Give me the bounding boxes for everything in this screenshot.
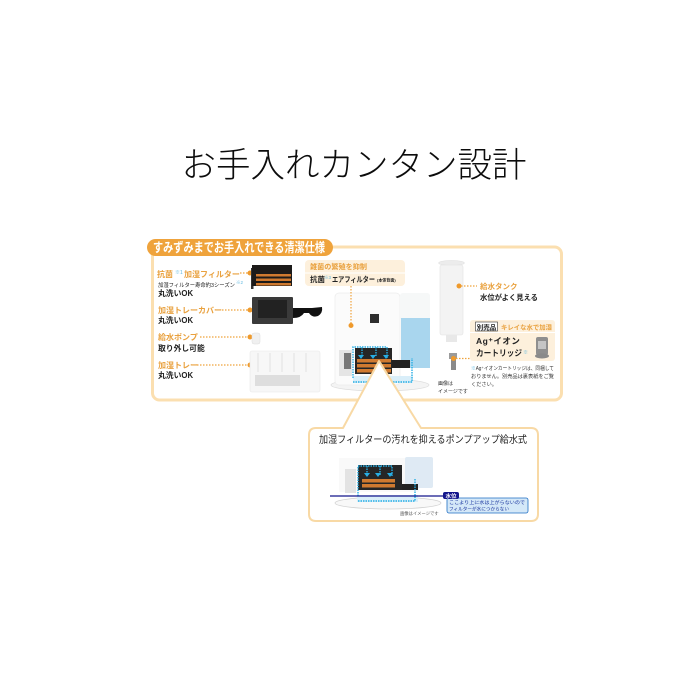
label: pump	[158, 332, 205, 353]
label: tray cover: 加湿トレーカバー	[158, 305, 222, 315]
callout panel: pump-up water supply	[309, 361, 538, 521]
small cartridge	[449, 353, 470, 370]
note: cartridge: ※Ag⁺イオンカートリッジは、同梱して	[471, 364, 554, 372]
callout: air filter: ※3	[324, 275, 331, 280]
note: cartridge: ください。	[471, 381, 497, 388]
label: humidifying filter: 加湿フィルター	[184, 269, 240, 279]
heading pill: すみずみまでお手入れできる清潔仕様	[153, 240, 325, 255]
label: water tank	[456, 281, 538, 302]
icon: pump	[252, 333, 260, 344]
callout: air filter	[305, 260, 405, 286]
icon: humidifying filter	[251, 265, 292, 289]
label: humidifying filter: 抗菌	[157, 269, 173, 279]
callout: air filter: エアフィルター	[332, 274, 375, 284]
callout: air filter: (本体背面)	[377, 276, 396, 282]
image caption: 画像はイメージです	[400, 510, 439, 517]
note: image only: イメージです	[438, 389, 468, 395]
water level note	[443, 492, 528, 513]
note: image only	[438, 380, 468, 395]
callout: Ag+ cartridge	[470, 320, 555, 361]
label: tray	[158, 360, 198, 380]
callout: Ag+ cartridge: 別売品	[477, 322, 497, 332]
heading: 加湿フィルターの汚れを抑えるポンプアップ給水式	[319, 433, 527, 446]
callout: Ag+ cartridge: カートリッジ	[476, 348, 522, 358]
leader lines	[197, 270, 252, 368]
label: water tank: 水位がよく見える	[480, 292, 538, 302]
callout: Ag+ cartridge: キレイな水で加湿	[501, 322, 552, 332]
tank on unit	[400, 293, 430, 368]
icon: tray cover	[252, 297, 322, 324]
icon: cartridge	[535, 337, 549, 358]
icon: tray	[250, 351, 320, 392]
label: tray: 加湿トレー	[158, 360, 198, 370]
callout: air filter: 雑菌の繁殖を抑制	[310, 262, 367, 271]
label: pump: 取り外し可能	[158, 343, 205, 353]
note: cartridge	[471, 364, 554, 388]
callout: Ag+ cartridge: Ag⁺イオン	[476, 336, 520, 346]
water level note: 水位	[445, 492, 457, 500]
note: image only: 画像は	[438, 380, 453, 387]
water level note: フィルターが水につからない	[449, 506, 509, 512]
callout: Ag+ cartridge: ※	[523, 350, 528, 356]
note: cartridge: おりません。別売品は裏表紙をご覧	[471, 372, 554, 380]
label: tray: 丸洗いOK	[158, 370, 193, 380]
label: humidifying filter: 加湿フィルター寿命約3シーズン	[158, 281, 235, 289]
label: humidifying filter: ※2	[236, 280, 243, 285]
logo	[370, 314, 379, 323]
leader: air filter	[348, 286, 354, 328]
water level note: ここより上に水は上がらないので	[449, 499, 525, 506]
label: humidifying filter	[157, 269, 243, 298]
label: pump: 給水ポンプ	[158, 332, 198, 342]
unit: humidifier	[331, 293, 430, 391]
filter cutaway	[339, 347, 413, 383]
diagram	[330, 457, 444, 509]
label: water tank: 給水タンク	[480, 281, 518, 291]
icon: water tank	[438, 260, 464, 342]
label: tray cover: 丸洗いOK	[158, 315, 193, 325]
title: お手入れカンタン設計	[182, 147, 526, 185]
label: humidifying filter: 丸洗いOK	[158, 288, 193, 298]
callout: air filter: 抗菌	[310, 274, 325, 284]
label: humidifying filter: ※1	[175, 270, 183, 276]
panel: cleaning features	[147, 239, 562, 400]
label: tray cover	[158, 305, 222, 325]
